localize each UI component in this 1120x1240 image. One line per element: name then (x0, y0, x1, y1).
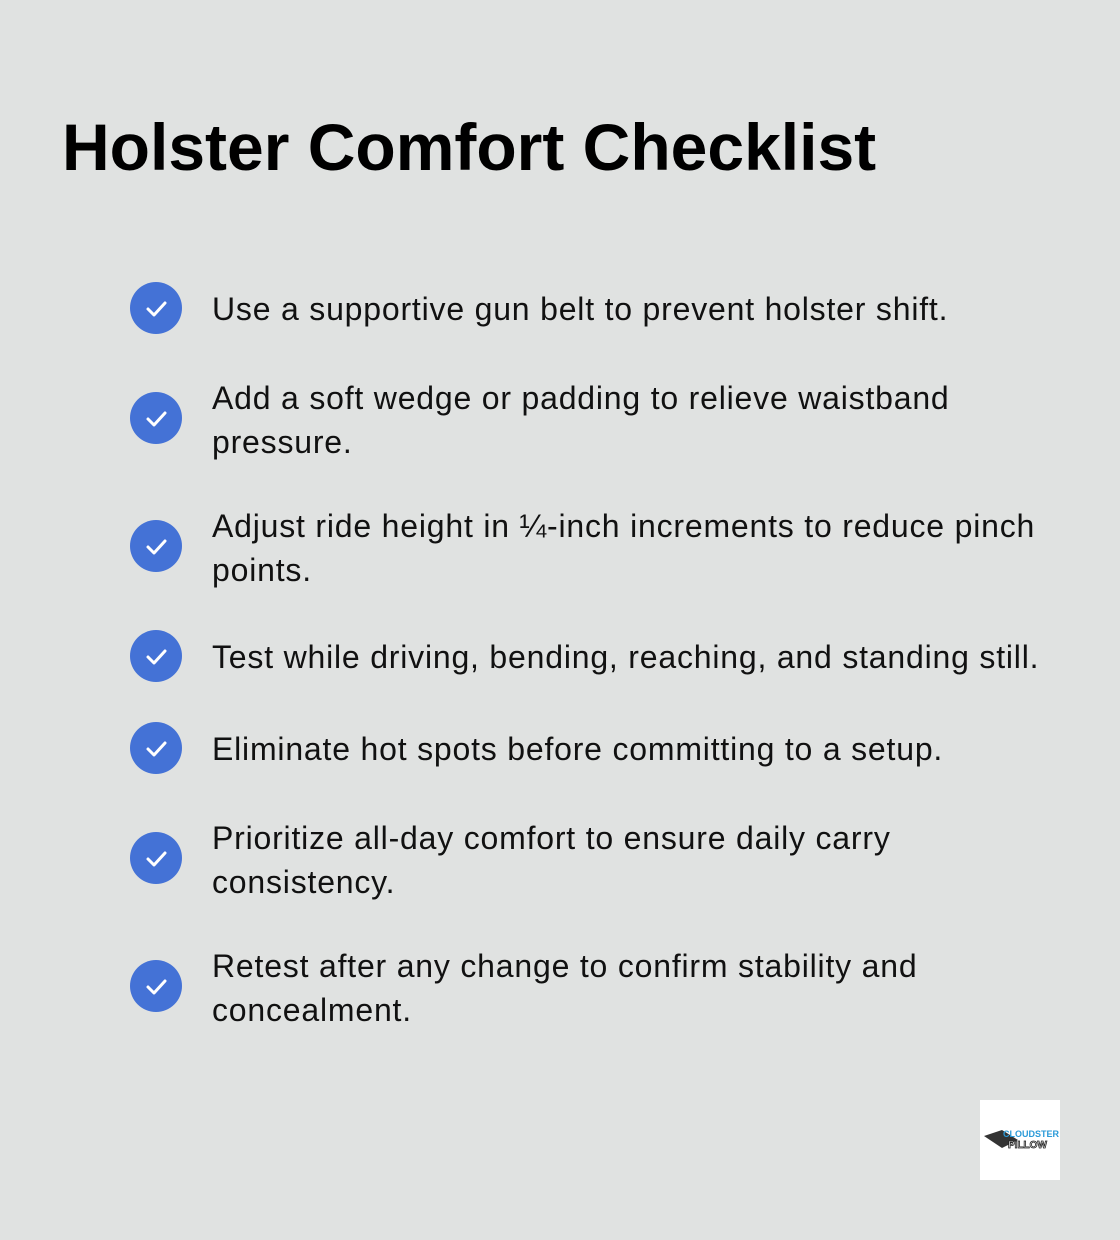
text (212, 948, 917, 1028)
icon: check (130, 960, 182, 1012)
item 5 (130, 722, 943, 774)
text: Retest after any change to confirm stability and (212, 948, 917, 984)
text: Prioritize all-day comfort to ensure daily carry (212, 820, 891, 856)
icon: check (130, 722, 182, 774)
icon: check (130, 392, 182, 444)
logo: CLOUDSTER (1003, 1129, 1060, 1139)
text: Test while driving, bending, reaching, and standing still. (212, 639, 1039, 675)
text: Adjust ride height in ¼-inch increments to reduce pinch (212, 508, 1035, 544)
icon: check (130, 520, 182, 572)
item 1 (130, 282, 948, 334)
text: Add a soft wedge or padding to relieve waistband (212, 380, 950, 416)
item 4 (130, 630, 1039, 682)
text: concealment. (212, 992, 412, 1028)
text (212, 820, 891, 900)
item 6 (130, 820, 891, 900)
item 2 (130, 380, 950, 460)
title: Holster Comfort Checklist (62, 110, 876, 184)
text (212, 508, 1035, 588)
text (212, 380, 950, 460)
text: Eliminate hot spots before committing to a setup. (212, 731, 943, 767)
icon: check (130, 832, 182, 884)
text: consistency. (212, 864, 395, 900)
logo (980, 1100, 1060, 1180)
item 7 (130, 948, 917, 1028)
icon: check (130, 630, 182, 682)
icon: check (130, 282, 182, 334)
logo: PILLOW (1008, 1140, 1047, 1151)
text: Use a supportive gun belt to prevent holster shift. (212, 291, 948, 327)
text: points. (212, 552, 312, 588)
text: pressure. (212, 424, 353, 460)
item 3 (130, 508, 1035, 588)
